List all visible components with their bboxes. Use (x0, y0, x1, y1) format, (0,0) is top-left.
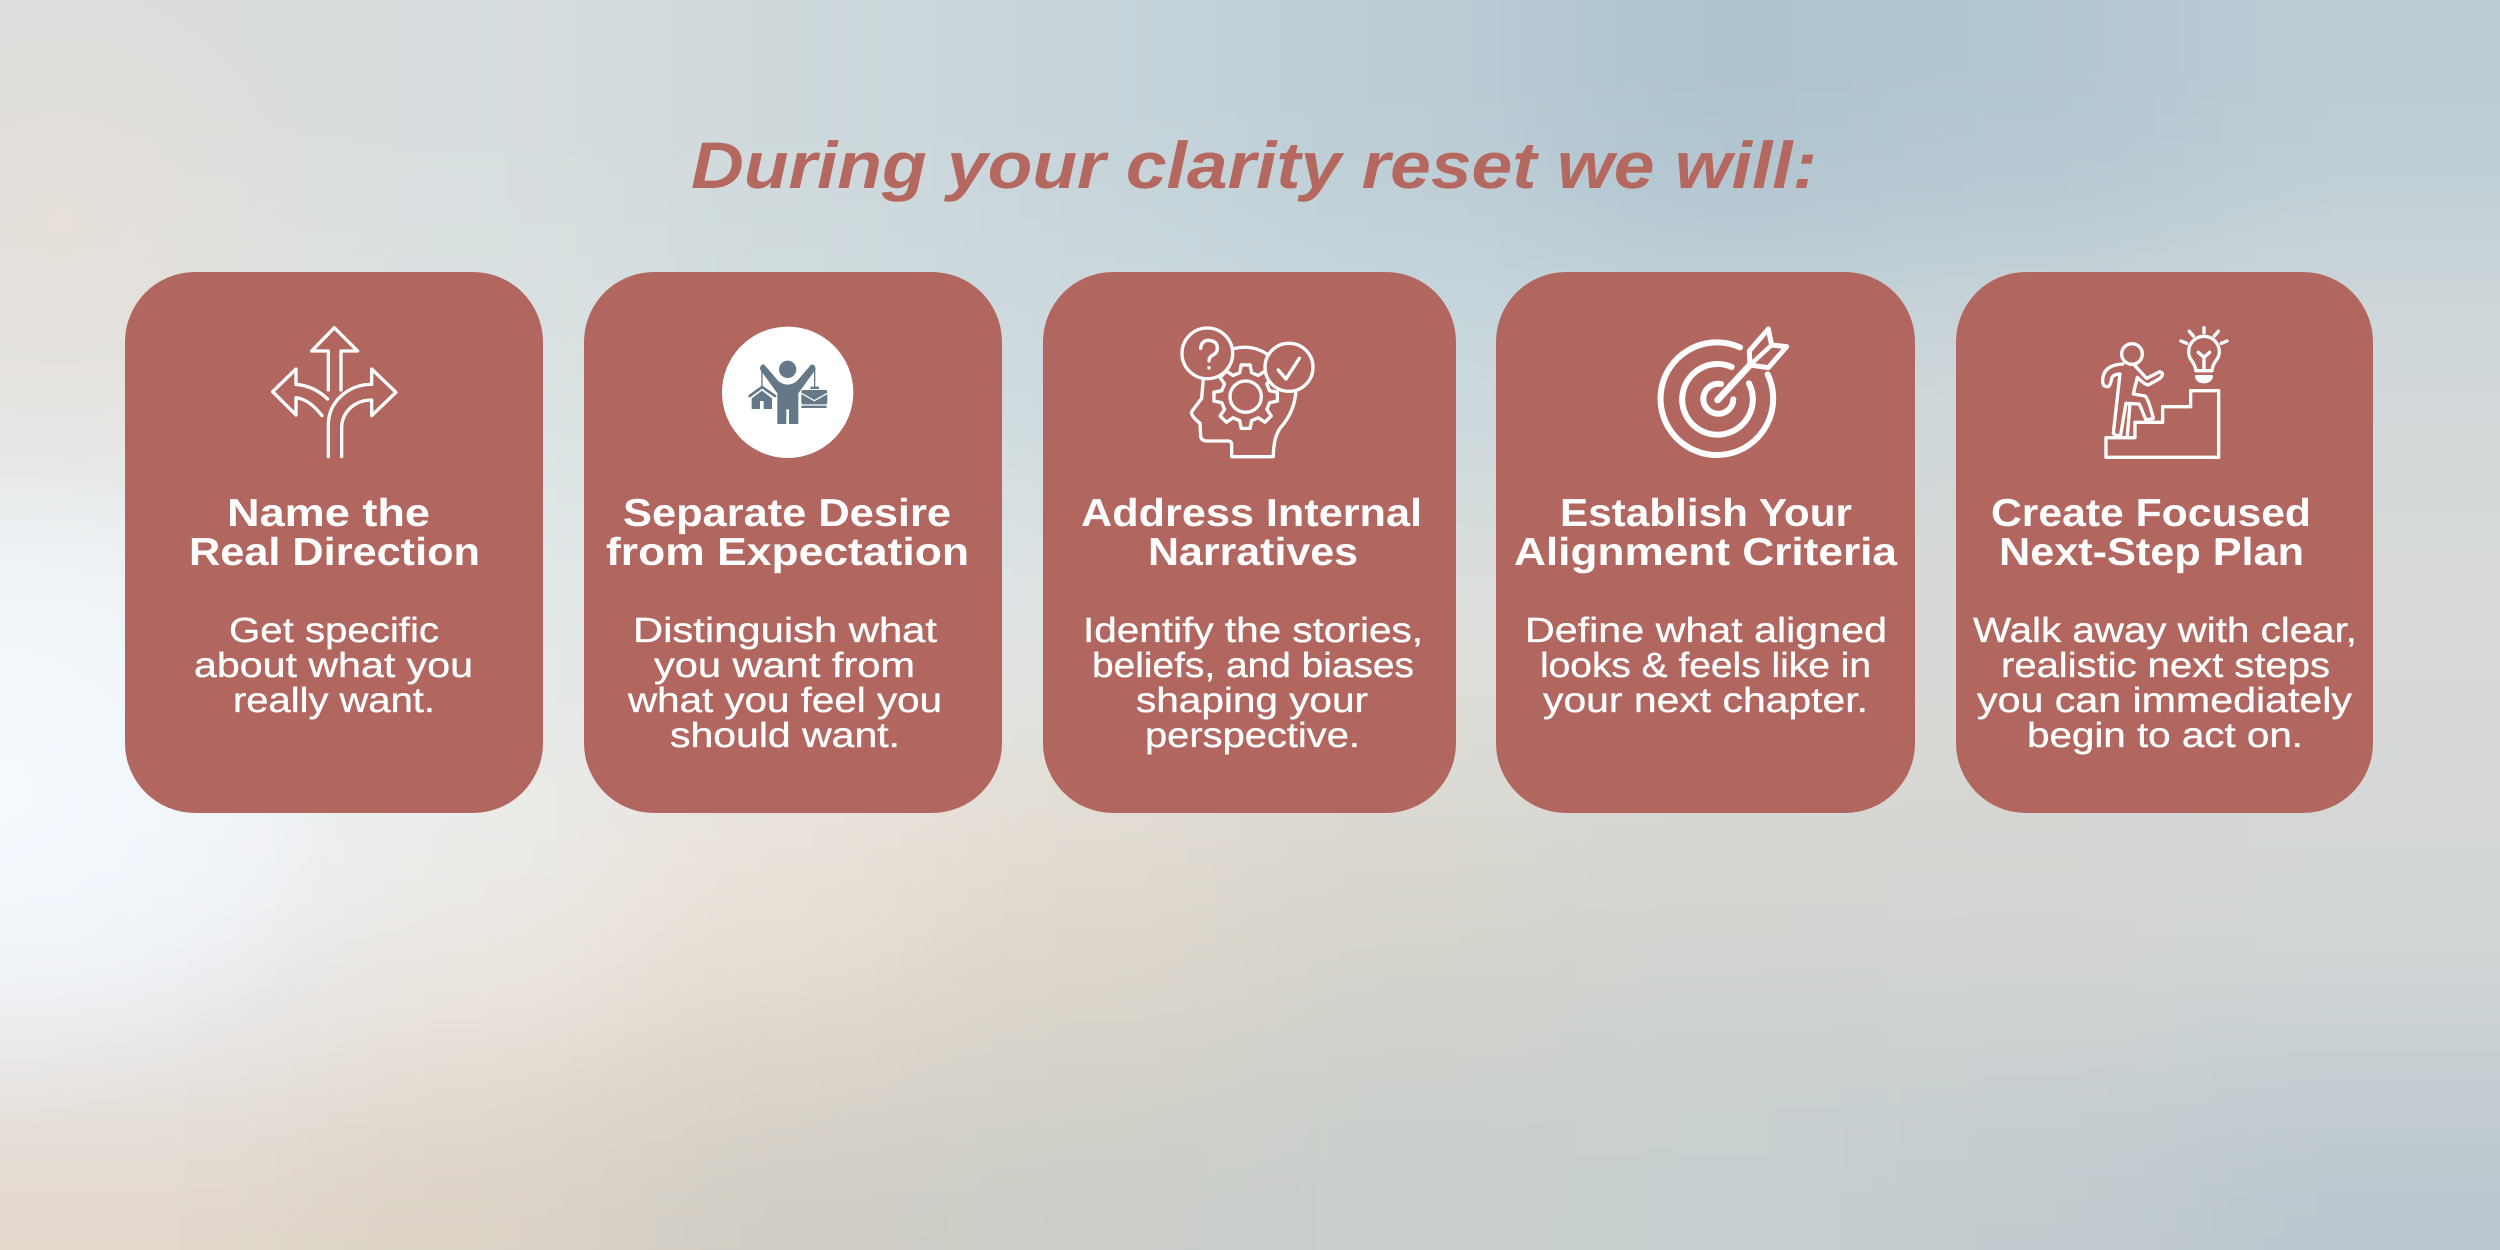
heading: name the real direction: Real Direction (189, 531, 480, 574)
text: define what aligned: Define what aligned (1525, 611, 1887, 650)
heading: name the real direction: Name the (227, 492, 430, 535)
text: distinguish what: Distinguish what (633, 611, 937, 650)
text: define what aligned (1525, 611, 1887, 720)
title: During your clarity reset we will: (691, 128, 1817, 202)
text: get specific: about what you (194, 646, 473, 685)
icon: head with gear and question (1182, 328, 1313, 457)
heading: separate desire (606, 492, 969, 574)
text: walk away: you can immediately (1977, 681, 2353, 720)
heading: establish your: Alignment Criteria (1514, 531, 1897, 574)
text: get specific: Get specific (229, 611, 439, 650)
text: define what aligned: looks & feels like in (1540, 646, 1871, 685)
panel: name the real direction (125, 272, 543, 813)
text: distinguish what: what you feel you (627, 681, 942, 720)
icon: target with arrow (1661, 329, 1787, 455)
heading: establish your (1514, 492, 1897, 574)
text: distinguish what: should want. (670, 716, 900, 755)
text: walk away: begin to act on. (2027, 716, 2303, 755)
heading: create focused (1991, 492, 2311, 574)
icon: three-way arrows (273, 328, 396, 457)
icon: person climbing stairs to light bulb (2103, 328, 2227, 457)
text: get specific: really want. (233, 681, 435, 720)
text: distinguish what (627, 611, 942, 755)
text: walk away: realistic next steps (2001, 646, 2330, 685)
heading: address internal: Narratives (1148, 531, 1358, 574)
icon: person balancing home and work (722, 327, 853, 458)
heading: address internal: Address Internal (1081, 492, 1422, 535)
text: walk away (1973, 611, 2357, 755)
heading: name the real direction (189, 492, 480, 574)
heading: separate desire: from Expectation (606, 531, 969, 574)
panel: establish alignment criteria (1496, 272, 1915, 813)
text: get specific (194, 611, 473, 720)
heading: address internal (1081, 492, 1422, 574)
text: identify the stories: beliefs, and biases (1092, 646, 1414, 685)
text: identify the stories: shaping your (1136, 681, 1368, 720)
text: identify the stories: perspective. (1145, 716, 1360, 755)
heading: establish your: Establish Your (1560, 492, 1852, 535)
text: walk away: Walk away with clear, (1973, 611, 2357, 650)
text: distinguish what: you want from (654, 646, 915, 685)
text: identify the stories: Identify the stories, (1083, 611, 1423, 650)
panel: separate desire from expectation (584, 272, 1002, 813)
heading: create focused: Next-Step Plan (1999, 531, 2304, 574)
text: identify the stories (1083, 611, 1423, 755)
heading: separate desire: Separate Desire (623, 492, 951, 535)
text: define what aligned: your next chapter. (1543, 681, 1868, 720)
heading: create focused: Create Focused (1991, 492, 2311, 535)
panel: address internal narratives (1043, 272, 1456, 813)
panel: create focused next-step plan (1956, 272, 2373, 813)
